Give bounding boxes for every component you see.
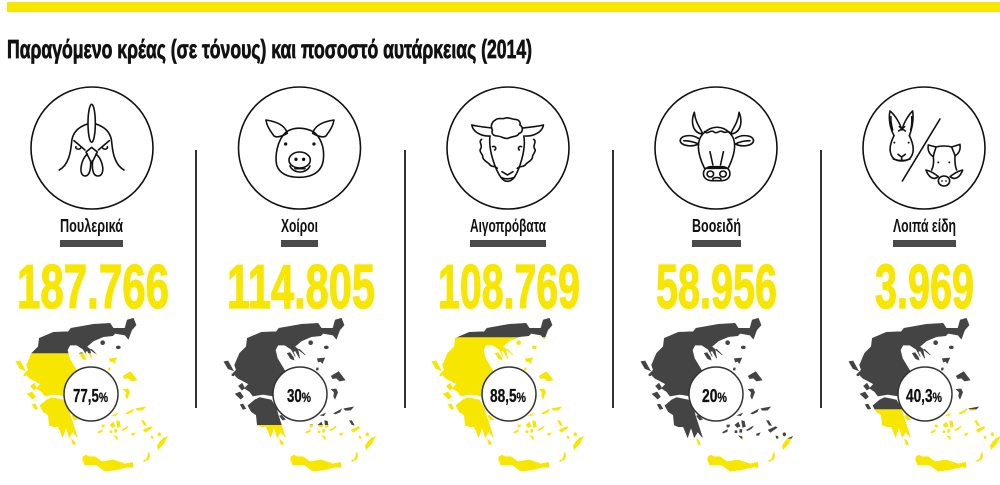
divider 4	[820, 150, 822, 408]
label: Λοιπά είδη: Λοιπά είδη	[893, 216, 956, 236]
map of Greece	[432, 318, 583, 471]
percentage badge	[689, 367, 743, 421]
map of Greece	[641, 318, 792, 471]
title: Παραγόμενο κρέας (σε τόνους) και ποσοστό αυτάρκειας (2014)	[7, 34, 532, 64]
label bar	[60, 240, 123, 247]
value: 114.805	[227, 253, 375, 322]
map of Greece	[16, 318, 167, 471]
percentage badge	[482, 367, 536, 421]
icon: sheep	[447, 87, 569, 209]
percentage badge	[273, 367, 327, 421]
icon: rabbit and boar	[863, 87, 985, 209]
icon: cow	[655, 87, 777, 209]
map of Greece	[224, 318, 375, 471]
label: Χοίροι: Χοίροι	[281, 216, 318, 236]
label: Πουλερικά: Πουλερικά	[60, 216, 123, 236]
percentage badge: 40,3%	[906, 386, 942, 406]
top yellow bar	[7, 2, 1000, 12]
value: 108.769	[438, 253, 580, 322]
value: 58.956	[656, 253, 777, 322]
label: Αιγοπρόβατα: Αιγοπρόβατα	[470, 216, 546, 236]
divider 1	[195, 150, 197, 408]
panel: sheep and goats	[432, 87, 583, 471]
icon: rooster	[31, 87, 153, 209]
icon: pig	[238, 87, 360, 209]
panel: other species	[849, 87, 1000, 471]
panel: poultry	[16, 87, 169, 471]
label bar	[692, 240, 741, 247]
label: Βοοειδή: Βοοειδή	[692, 216, 741, 236]
divider 3	[612, 150, 614, 408]
percentage badge: 20%	[702, 386, 727, 406]
percentage badge: 77,5%	[73, 386, 108, 406]
label bar	[893, 240, 956, 247]
label bar	[470, 240, 546, 247]
percentage badge	[898, 367, 952, 421]
percentage badge: 30%	[287, 386, 311, 406]
map of Greece	[849, 318, 1000, 471]
divider 2	[404, 150, 406, 408]
panel: cattle	[641, 87, 792, 471]
label bar	[281, 240, 318, 247]
panel: pigs	[224, 87, 375, 471]
value: 187.766	[17, 253, 169, 322]
percentage badge: 88,5%	[490, 386, 526, 406]
percentage badge	[64, 367, 118, 421]
